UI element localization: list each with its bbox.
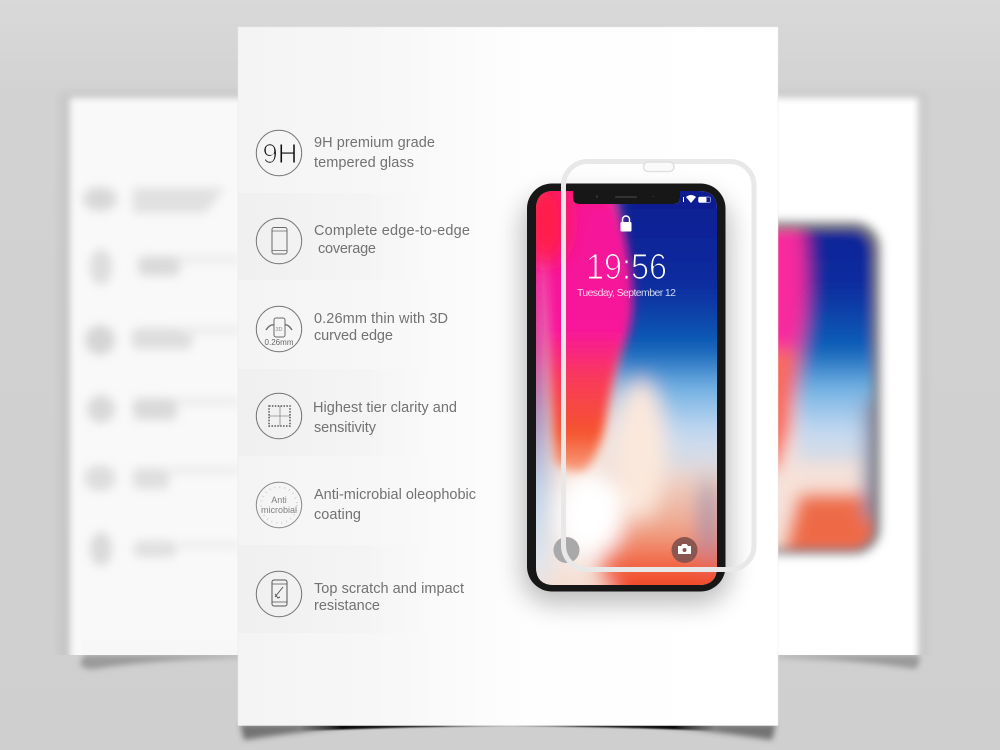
text: thin with curved edge: curved edge [314,328,393,344]
feature: edge-to-edge coverage [256,218,470,264]
text: edge-to-edge coverage [314,223,470,257]
icon: dotted grid [256,393,302,439]
icon: curved edge phone: 0.26mm [264,338,294,347]
feature: clarity and sensitivity [256,393,457,439]
wallpaper [536,191,717,585]
text: 9H premium grade: 9H premium grade [314,135,435,151]
icon: phone outline [256,218,302,264]
icon: anti-microbial badge: Anti [271,495,287,505]
text: anti-microbial coating: Anti-microbial oleophobic [314,487,476,503]
text: thin with curved edge [314,311,448,344]
icon: curved edge phone: 3D [275,327,283,333]
red top-left corner glow [524,180,568,264]
icon: 9H badge [256,130,302,176]
blurred phone [778,214,888,562]
feature: anti-microbial [256,482,476,528]
glass screen protector outline [564,162,754,570]
icon: lock [620,216,632,232]
text: clarity and sensitivity [313,400,457,436]
text: scratch and impact: resistance [314,598,380,614]
feature: scratch and impact [256,571,464,617]
notch details [596,195,654,198]
icon: curved edge phone [256,306,302,352]
phone body [527,184,726,592]
feature: 0.26mm thin [256,306,448,352]
icon: scratched phone [256,571,302,617]
status icons [683,195,710,203]
icon: camera button [672,537,698,563]
text: scratch and impact: Top scratch and impact [314,581,464,597]
text: thin with curved edge: 0.26mm thin with 3D [314,311,448,327]
text: anti-microbial coating [314,487,476,523]
text: 9H premium grade: tempered glass [314,155,414,171]
text: scratch and impact [314,581,464,614]
text: clarity and sensitivity: Highest tier clarity and [313,400,457,416]
icon: 9H badge: 9H [262,138,298,169]
feature: 9H glass [256,130,435,176]
icon: anti-microbial badge [256,482,302,528]
phone shadow [522,196,730,604]
shadow under front page [240,724,776,740]
text: edge-to-edge coverage: coverage [318,241,376,257]
text: edge-to-edge coverage: Complete edge-to-edge [314,223,470,239]
text: 9H premium grade [314,135,435,171]
icon: anti-microbial badge: microbial [261,505,297,515]
panel: blurred back page left [64,97,238,672]
text: clarity and sensitivity: sensitivity [314,420,377,436]
panel: front page [238,27,778,726]
phone [527,184,726,592]
soft lower area [536,191,717,585]
text: anti-microbial coating: coating [314,507,361,523]
date: Tuesday, September 12 [577,287,676,299]
panel: blurred back page right [778,96,922,671]
magenta to orange sweep [540,170,633,471]
icon: flashlight button [554,537,580,563]
time: 19:56 [586,246,667,287]
